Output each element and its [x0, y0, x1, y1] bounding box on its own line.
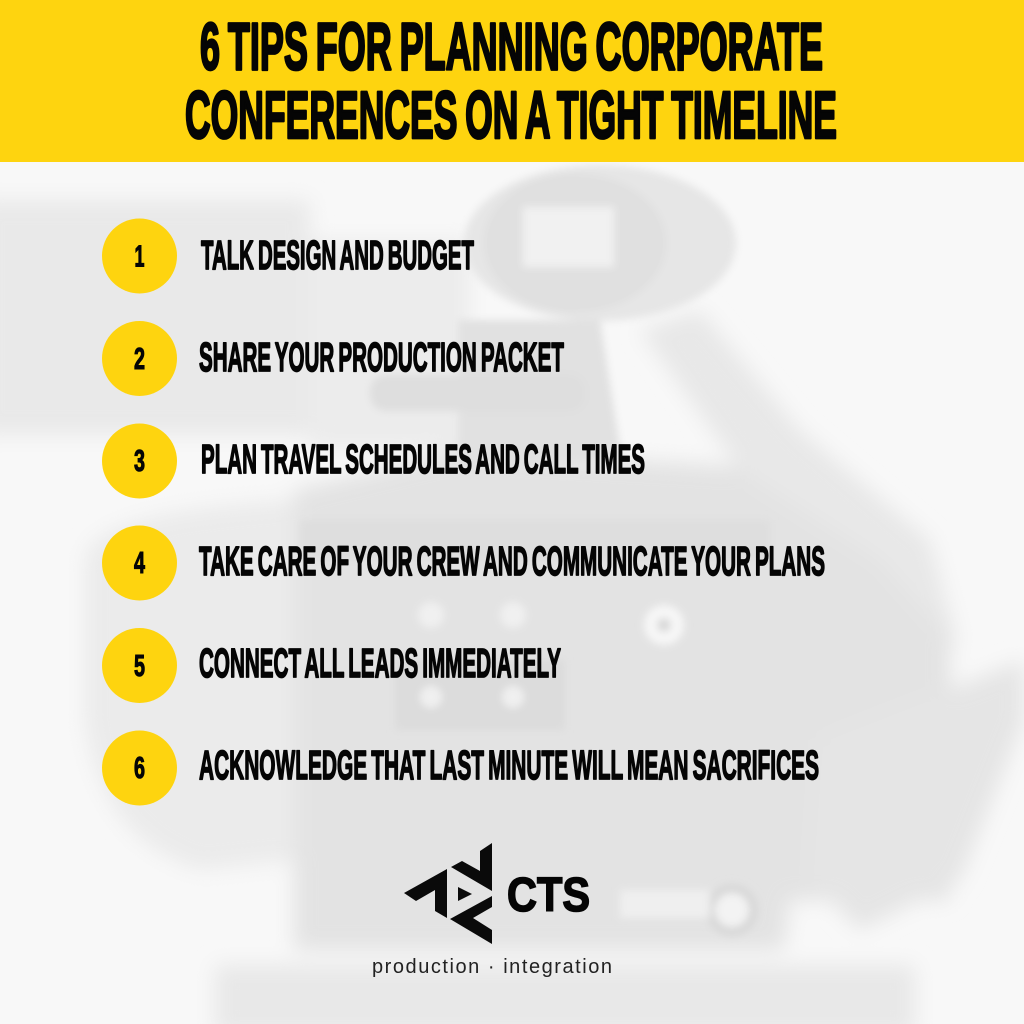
tip 2: SHARE YOUR PRODUCTION PACKET: [199, 334, 564, 380]
tip 5: [102, 628, 561, 703]
tagline: production · integration: [372, 956, 612, 978]
logo: CTS: [372, 843, 612, 978]
icon: triangular logo mark: [404, 843, 492, 944]
tip 6: [102, 730, 819, 806]
tip 6: 6: [134, 750, 145, 785]
title banner: [0, 0, 1024, 162]
tip 5: 5: [134, 648, 145, 683]
tip 1: [102, 218, 474, 294]
logo wordmark: CTS: [507, 869, 590, 922]
tip 5: CONNECT ALL LEADS IMMEDIATELY: [199, 640, 561, 686]
tip 2: 2: [134, 341, 145, 376]
text: TALK DESIGN AND BUDGET: [201, 232, 474, 278]
tip 2: [102, 321, 564, 396]
tip 3: [102, 424, 645, 498]
tip 4: 4: [134, 545, 145, 580]
tip 1: 1: [134, 238, 144, 274]
tip 4: [102, 526, 825, 600]
tip 3: 3: [134, 443, 145, 478]
